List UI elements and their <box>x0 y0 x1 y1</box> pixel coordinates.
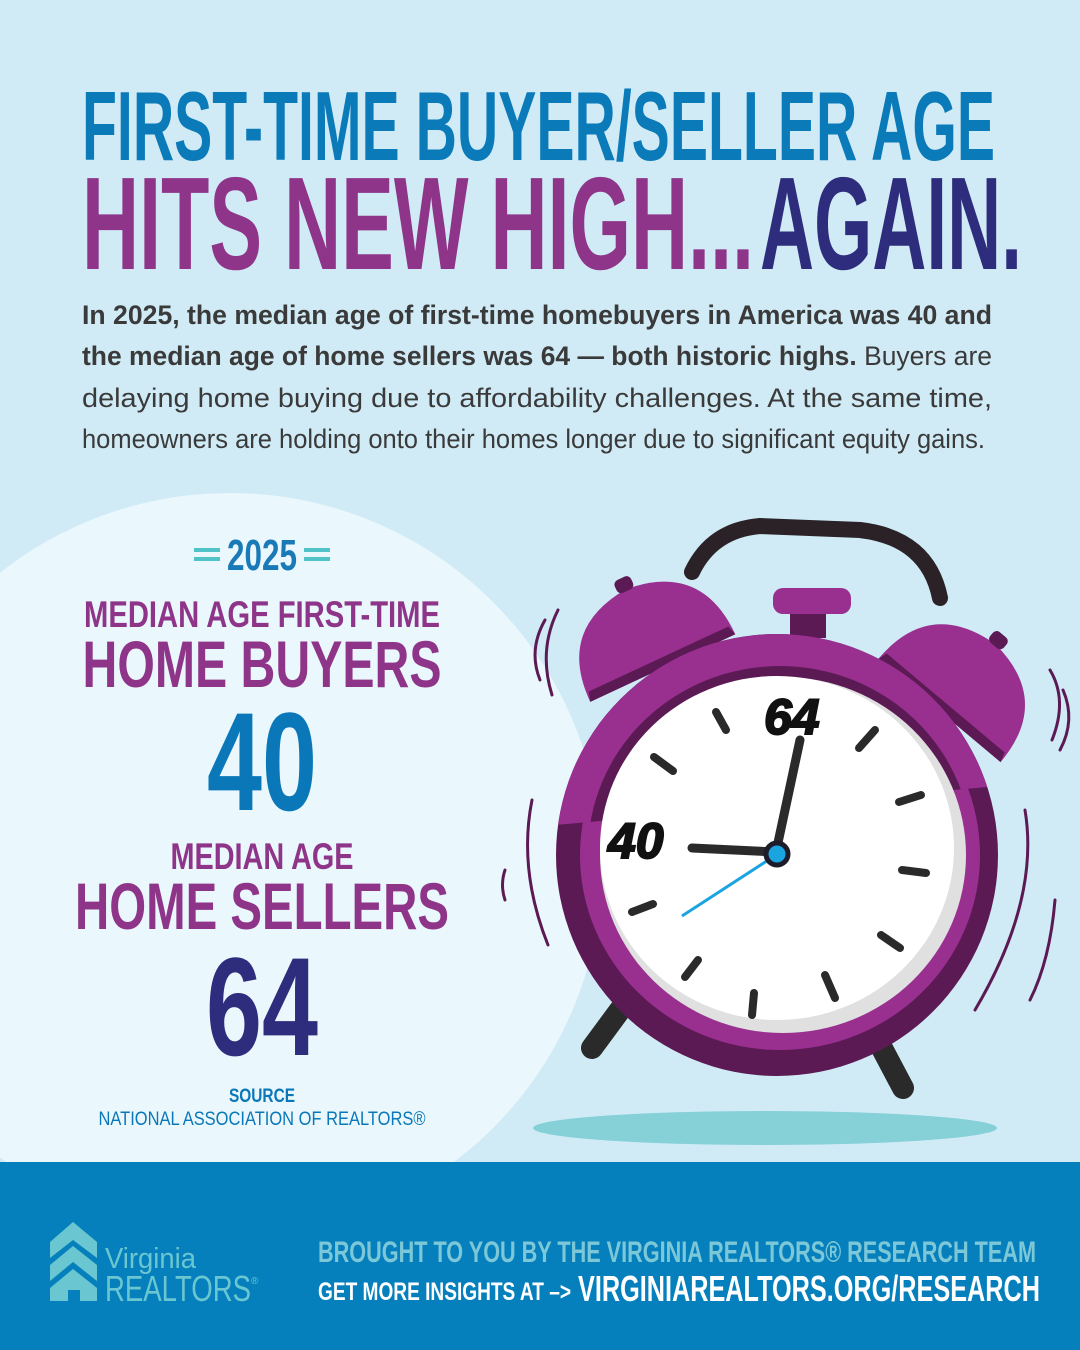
sellers label: HOME SELLERS <box>75 869 449 943</box>
logo <box>50 1222 259 1309</box>
sellers number: 64 <box>206 928 318 1085</box>
title <box>82 71 1022 297</box>
source <box>98 1086 426 1130</box>
vibration lines <box>502 610 1069 1010</box>
logo: Virginia <box>105 1243 197 1275</box>
intro paragraph: In 2025, the median age of first-time homebuyers in America was 40 and <box>82 300 992 330</box>
bells <box>548 545 735 702</box>
source: NATIONAL ASSOCIATION OF REALTORS® <box>98 1109 426 1130</box>
clock illustration: 40 <box>607 813 664 869</box>
buyers label <box>82 594 442 701</box>
logo: ® <box>251 1276 259 1287</box>
footer credits: GET MORE INSIGHTS AT –> <box>318 1278 571 1306</box>
background circle <box>0 493 602 1237</box>
intro paragraph: delaying home buying due to affordability challenges. At the same time, <box>82 383 992 413</box>
sellers label: MEDIAN AGE <box>170 836 354 877</box>
intro paragraph: homeowners are holding onto their homes longer due to significant equity gains. <box>82 424 985 454</box>
intro paragraph <box>82 300 992 454</box>
buyers label: HOME BUYERS <box>82 627 442 701</box>
buyers label: MEDIAN AGE FIRST-TIME <box>84 594 440 635</box>
clock illustration: 64 <box>764 689 820 745</box>
year label: 2025 <box>227 531 297 580</box>
intro paragraph: the median age of home sellers was 64 — both historic highs. Buyers are <box>82 341 992 371</box>
source: SOURCE <box>229 1086 295 1107</box>
stats panel <box>75 531 449 1130</box>
footer credits <box>318 1236 1040 1309</box>
buyers number: 40 <box>207 683 317 840</box>
footer <box>0 1162 1080 1350</box>
logo: REALTORS <box>105 1268 251 1309</box>
sellers label <box>75 836 449 943</box>
clock illustration <box>502 526 1069 1145</box>
